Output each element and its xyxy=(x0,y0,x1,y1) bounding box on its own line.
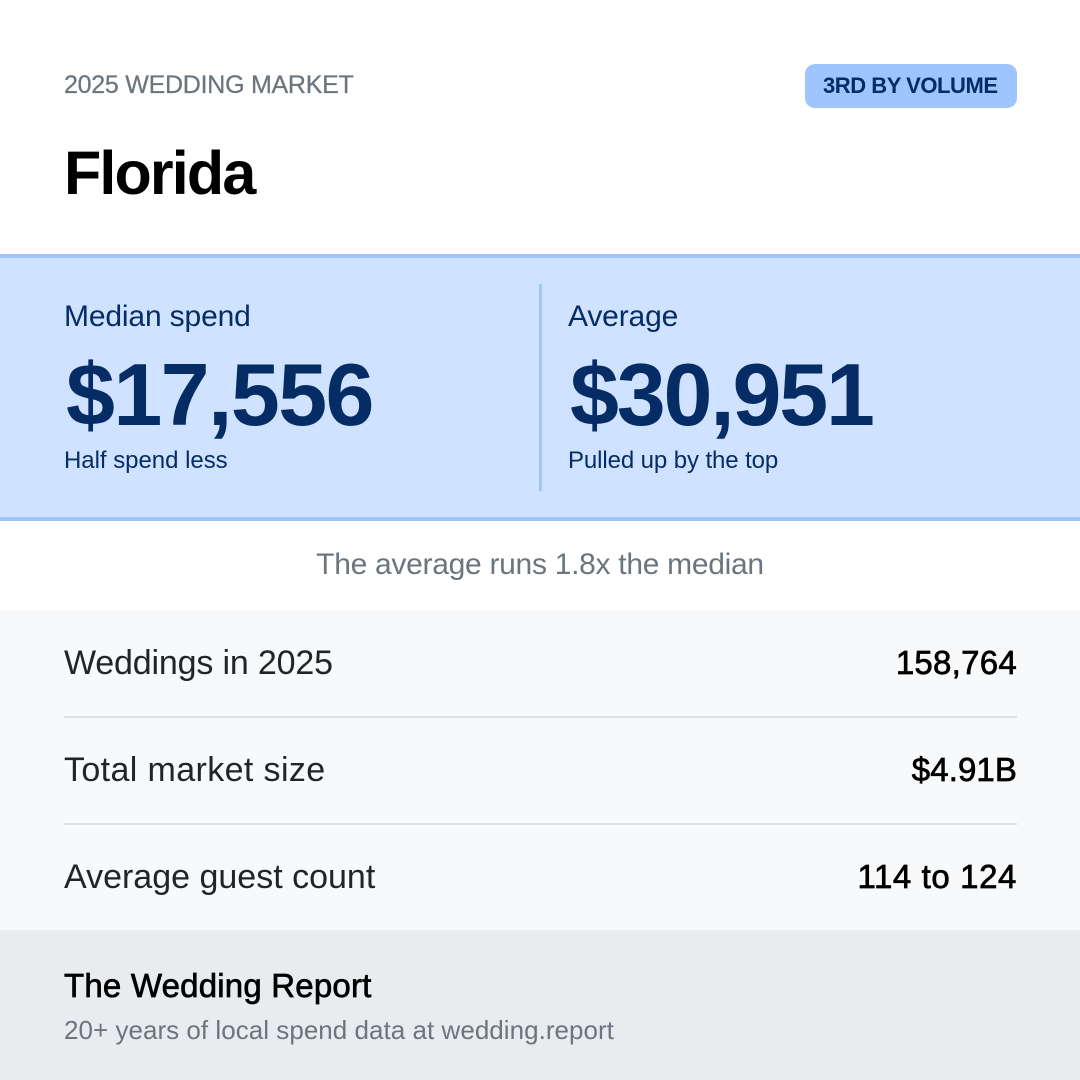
median note: Half spend less xyxy=(64,447,228,474)
average label: Average xyxy=(568,300,678,333)
panel: market stats xyxy=(0,610,1080,930)
market size value: $4.91B xyxy=(912,751,1017,788)
average note: Pulled up by the top xyxy=(568,447,778,474)
panel: spend figures xyxy=(0,254,1080,521)
median spend block xyxy=(64,300,373,474)
market size label: Total market size xyxy=(64,751,326,789)
column divider xyxy=(539,284,542,491)
guest count label: Average guest count xyxy=(64,858,375,896)
footer brand: The Wedding Report xyxy=(64,967,372,1004)
row: weddings xyxy=(64,644,1017,682)
weddings label: Weddings in 2025 xyxy=(64,644,333,682)
badge: 3rd by volume: 3RD BY VOLUME xyxy=(823,73,998,98)
median label: Median spend xyxy=(64,300,251,333)
median value: $17,556 xyxy=(66,345,373,444)
average block xyxy=(568,300,873,474)
average value: $30,951 xyxy=(570,345,873,444)
title: Florida xyxy=(64,139,254,207)
row: guest count xyxy=(64,858,1017,896)
footer xyxy=(0,930,1080,1080)
ratio caption: The average runs 1.8x the median xyxy=(316,548,764,581)
guest count value: 114 to 124 xyxy=(857,858,1017,895)
header eyebrow: 2025 WEDDING MARKET xyxy=(64,71,354,99)
badge: 3rd by volume xyxy=(805,64,1017,108)
row: market size xyxy=(64,751,1017,789)
footer note: 20+ years of local spend data at wedding.report xyxy=(64,1015,614,1045)
weddings value: 158,764 xyxy=(896,644,1017,681)
